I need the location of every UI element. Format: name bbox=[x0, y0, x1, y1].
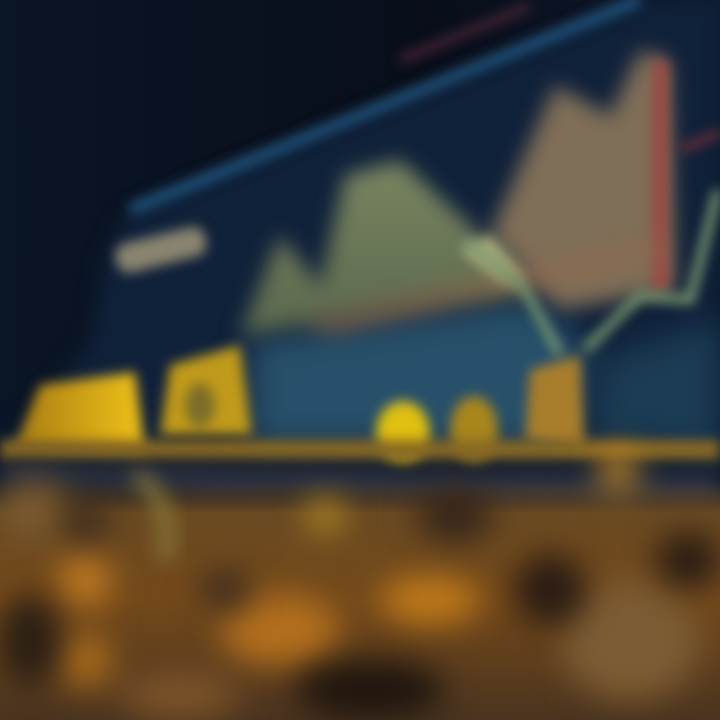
foreground bokeh base bbox=[0, 480, 720, 720]
lower teal chart band bbox=[250, 300, 590, 445]
panel top edge lines bbox=[130, 0, 640, 210]
right teal band bbox=[590, 320, 720, 450]
blurred label text bbox=[113, 224, 209, 275]
left gold block bbox=[15, 372, 145, 452]
gold coin stack bbox=[160, 345, 252, 435]
horizontal red band across area bbox=[300, 235, 660, 335]
gold coins bbox=[376, 355, 585, 465]
horizon band bbox=[0, 440, 720, 460]
red candlestick line bbox=[660, 60, 720, 290]
green trend lines bbox=[465, 190, 718, 355]
left glass outline bbox=[135, 475, 167, 560]
area chart: olive mountains bbox=[240, 50, 675, 335]
foreground orange bokeh bbox=[0, 450, 700, 720]
foreground dark bokeh bbox=[0, 489, 720, 720]
chart panel bbox=[0, 0, 720, 450]
table band bbox=[0, 462, 720, 510]
highlight ridge on the chart bbox=[460, 235, 530, 285]
